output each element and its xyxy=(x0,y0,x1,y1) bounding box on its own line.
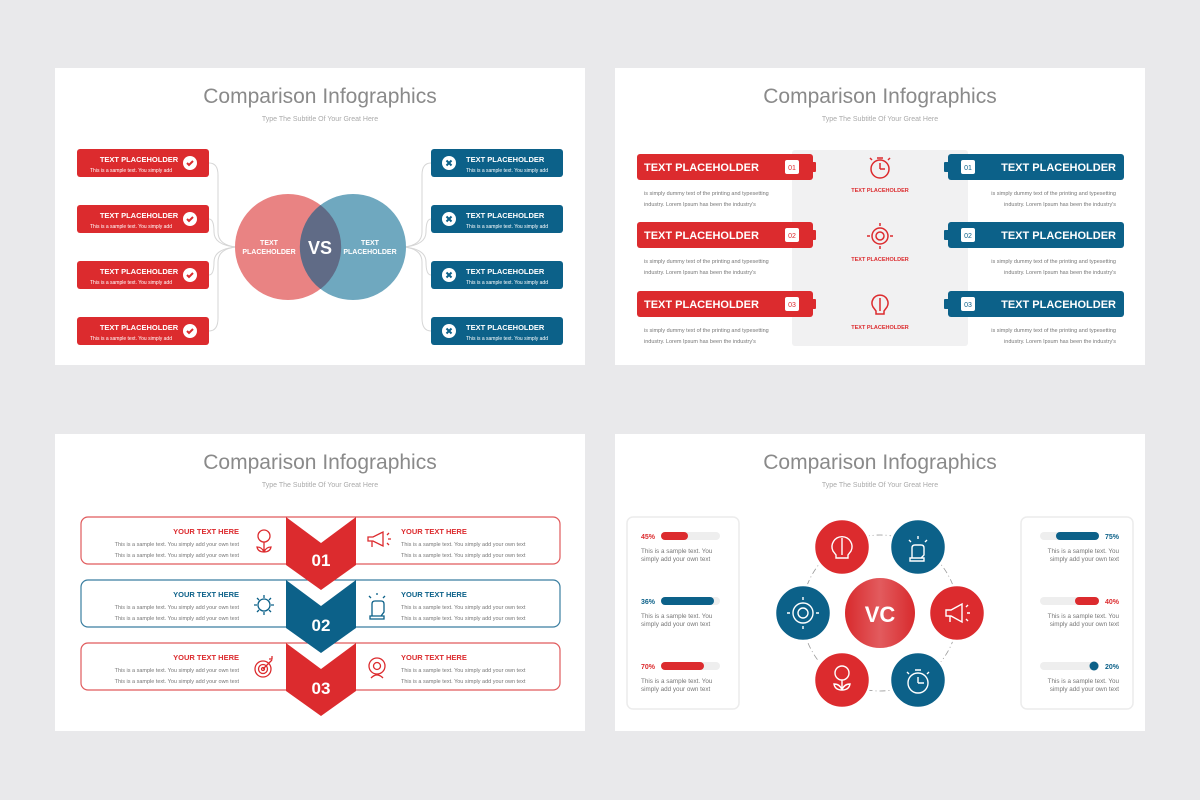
right stats card: simply add your own text xyxy=(1050,556,1119,563)
blue bars: industry. Lorem Ipsum has been the industry's xyxy=(1004,339,1116,345)
panel: chevron comparison: This is a sample text. You simply add your own text xyxy=(401,553,526,559)
blue option boxes: This is a sample text. You simply add xyxy=(466,224,548,230)
subtitle: Type The Subtitle Of Your Great Here xyxy=(822,482,938,489)
left stats card: 45% xyxy=(641,534,656,541)
blue option boxes xyxy=(431,149,563,345)
red bars: 03 xyxy=(788,302,796,309)
red option boxes: This is a sample text. You simply add xyxy=(90,280,172,286)
chevrons: 01 xyxy=(312,551,330,570)
blue option boxes: TEXT PLACEHOLDER xyxy=(466,323,545,332)
subtitle: Type The Subtitle Of Your Great Here xyxy=(262,482,378,489)
venn diagram: PLACEHOLDER xyxy=(242,249,296,256)
blue bars: is simply dummy text of the printing and typesetting xyxy=(991,328,1116,334)
left stats card: simply add your own text xyxy=(641,556,711,563)
subtitle: Type The Subtitle Of Your Great Here xyxy=(262,116,378,123)
venn diagram: VS xyxy=(308,238,332,258)
right stats card: simply add your own text xyxy=(1050,621,1119,628)
left stats card xyxy=(627,517,739,709)
panel: chevron comparison: This is a sample text. You simply add your own text xyxy=(401,679,526,685)
panel: chevron comparison: This is a sample text. You simply add your own text xyxy=(115,605,239,611)
row texts xyxy=(173,527,467,662)
panel: VC circle comparison xyxy=(615,434,1145,731)
panel: chevron comparison: This is a sample text. You simply add your own text xyxy=(115,679,239,685)
chevrons: 03 xyxy=(312,679,330,698)
panel: chevron comparison: This is a sample text. You simply add your own text xyxy=(401,605,526,611)
center icons xyxy=(867,158,893,314)
row texts: YOUR TEXT HERE xyxy=(173,590,239,599)
red bars xyxy=(637,154,816,345)
blue bars: industry. Lorem Ipsum has been the industry's xyxy=(1004,270,1116,276)
blue bars xyxy=(944,154,1124,345)
row boxes xyxy=(81,517,560,690)
venn diagram: TEXT xyxy=(361,240,380,247)
left stats card: 70% xyxy=(641,664,656,671)
row texts: YOUR TEXT HERE xyxy=(173,653,239,662)
blue bars: TEXT PLACEHOLDER xyxy=(1001,230,1116,242)
right stats card: simply add your own text xyxy=(1050,686,1119,693)
blue option boxes: TEXT PLACEHOLDER xyxy=(466,211,545,220)
red option boxes: This is a sample text. You simply add xyxy=(90,168,172,174)
panel: list comparison: TEXT PLACEHOLDER xyxy=(851,257,909,263)
blue option boxes: This is a sample text. You simply add xyxy=(466,280,548,286)
panel: chevron comparison: This is a sample text. You simply add your own text xyxy=(401,542,526,548)
red bars: industry. Lorem Ipsum has been the industry's xyxy=(644,270,756,276)
red bars: 01 xyxy=(788,165,796,172)
blue option boxes: TEXT PLACEHOLDER xyxy=(466,155,545,164)
red bars: is simply dummy text of the printing and typesetting xyxy=(644,259,769,265)
blue bars: TEXT PLACEHOLDER xyxy=(1001,162,1116,174)
blue bars: is simply dummy text of the printing and typesetting xyxy=(991,191,1116,197)
left stats card: simply add your own text xyxy=(641,621,711,628)
blue bars: industry. Lorem Ipsum has been the industry's xyxy=(1004,202,1116,208)
blue bars: 03 xyxy=(964,302,972,309)
red bars: is simply dummy text of the printing and typesetting xyxy=(644,191,769,197)
left stats card: This is a sample text. You xyxy=(641,678,713,685)
row texts: YOUR TEXT HERE xyxy=(401,590,467,599)
panel: chevron comparison: This is a sample text. You simply add your own text xyxy=(401,616,526,622)
title: Comparison Infographics xyxy=(203,451,437,474)
right stats card: 20% xyxy=(1105,664,1120,671)
right stats card: This is a sample text. You xyxy=(1048,678,1119,685)
panel: chevron comparison: This is a sample text. You simply add your own text xyxy=(115,542,239,548)
red bars: industry. Lorem Ipsum has been the industry's xyxy=(644,339,756,345)
panel: list comparison: TEXT PLACEHOLDER xyxy=(851,325,909,331)
red option boxes xyxy=(77,149,209,345)
right stats card xyxy=(1021,517,1133,709)
right stats card: This is a sample text. You xyxy=(1048,613,1119,620)
panel: chevron comparison: This is a sample text. You simply add your own text xyxy=(115,668,239,674)
left stats card: simply add your own text xyxy=(641,686,711,693)
blue bars: is simply dummy text of the printing and typesetting xyxy=(991,259,1116,265)
blue option boxes: This is a sample text. You simply add xyxy=(466,168,548,174)
title: Comparison Infographics xyxy=(763,85,997,108)
venn diagram: TEXT xyxy=(260,240,279,247)
red option boxes: TEXT PLACEHOLDER xyxy=(100,211,179,220)
panel: chevron comparison: This is a sample text. You simply add your own text xyxy=(401,668,526,674)
venn diagram: PLACEHOLDER xyxy=(343,249,397,256)
left stats card: This is a sample text. You xyxy=(641,613,713,620)
red bars: 02 xyxy=(788,233,796,240)
row icons xyxy=(254,530,391,678)
right stats card: 75% xyxy=(1105,534,1120,541)
panel: chevron comparison: This is a sample text. You simply add your own text xyxy=(115,616,239,622)
red option boxes: This is a sample text. You simply add xyxy=(90,336,172,342)
blue bars: 01 xyxy=(964,165,972,172)
subtitle: Type The Subtitle Of Your Great Here xyxy=(822,116,938,123)
left stats card: 36% xyxy=(641,599,656,606)
panel: chevron comparison xyxy=(55,434,585,731)
red option boxes: TEXT PLACEHOLDER xyxy=(100,323,179,332)
blue option boxes: TEXT PLACEHOLDER xyxy=(466,267,545,276)
chevrons xyxy=(286,517,356,716)
row texts: YOUR TEXT HERE xyxy=(173,527,239,536)
panel: chevron comparison: This is a sample text. You simply add your own text xyxy=(115,553,239,559)
red bars: TEXT PLACEHOLDER xyxy=(644,230,759,242)
red option boxes: This is a sample text. You simply add xyxy=(90,224,172,230)
circle icons xyxy=(787,536,970,693)
venn diagram xyxy=(235,194,406,300)
title: Comparison Infographics xyxy=(763,451,997,474)
blue option boxes: This is a sample text. You simply add xyxy=(466,336,548,342)
blue bars: 02 xyxy=(964,233,972,240)
title: Comparison Infographics xyxy=(203,85,437,108)
red bars: industry. Lorem Ipsum has been the industry's xyxy=(644,202,756,208)
panel: list comparison: TEXT PLACEHOLDER xyxy=(851,188,909,194)
red bars: is simply dummy text of the printing and typesetting xyxy=(644,328,769,334)
red option boxes: TEXT PLACEHOLDER xyxy=(100,155,179,164)
chevrons: 02 xyxy=(312,616,330,635)
row texts: YOUR TEXT HERE xyxy=(401,527,467,536)
right stats card: This is a sample text. You xyxy=(1048,548,1119,555)
red option boxes: TEXT PLACEHOLDER xyxy=(100,267,179,276)
blue bars: TEXT PLACEHOLDER xyxy=(1001,299,1116,311)
panel: list comparison xyxy=(615,68,1145,365)
row texts: YOUR TEXT HERE xyxy=(401,653,467,662)
left stats card: This is a sample text. You xyxy=(641,548,713,555)
right stats card: 40% xyxy=(1105,599,1120,606)
circle diagram xyxy=(775,519,985,708)
circle diagram: VC xyxy=(865,602,895,627)
panel: venn comparison xyxy=(55,68,585,365)
red bars: TEXT PLACEHOLDER xyxy=(644,299,759,311)
red bars: TEXT PLACEHOLDER xyxy=(644,162,759,174)
